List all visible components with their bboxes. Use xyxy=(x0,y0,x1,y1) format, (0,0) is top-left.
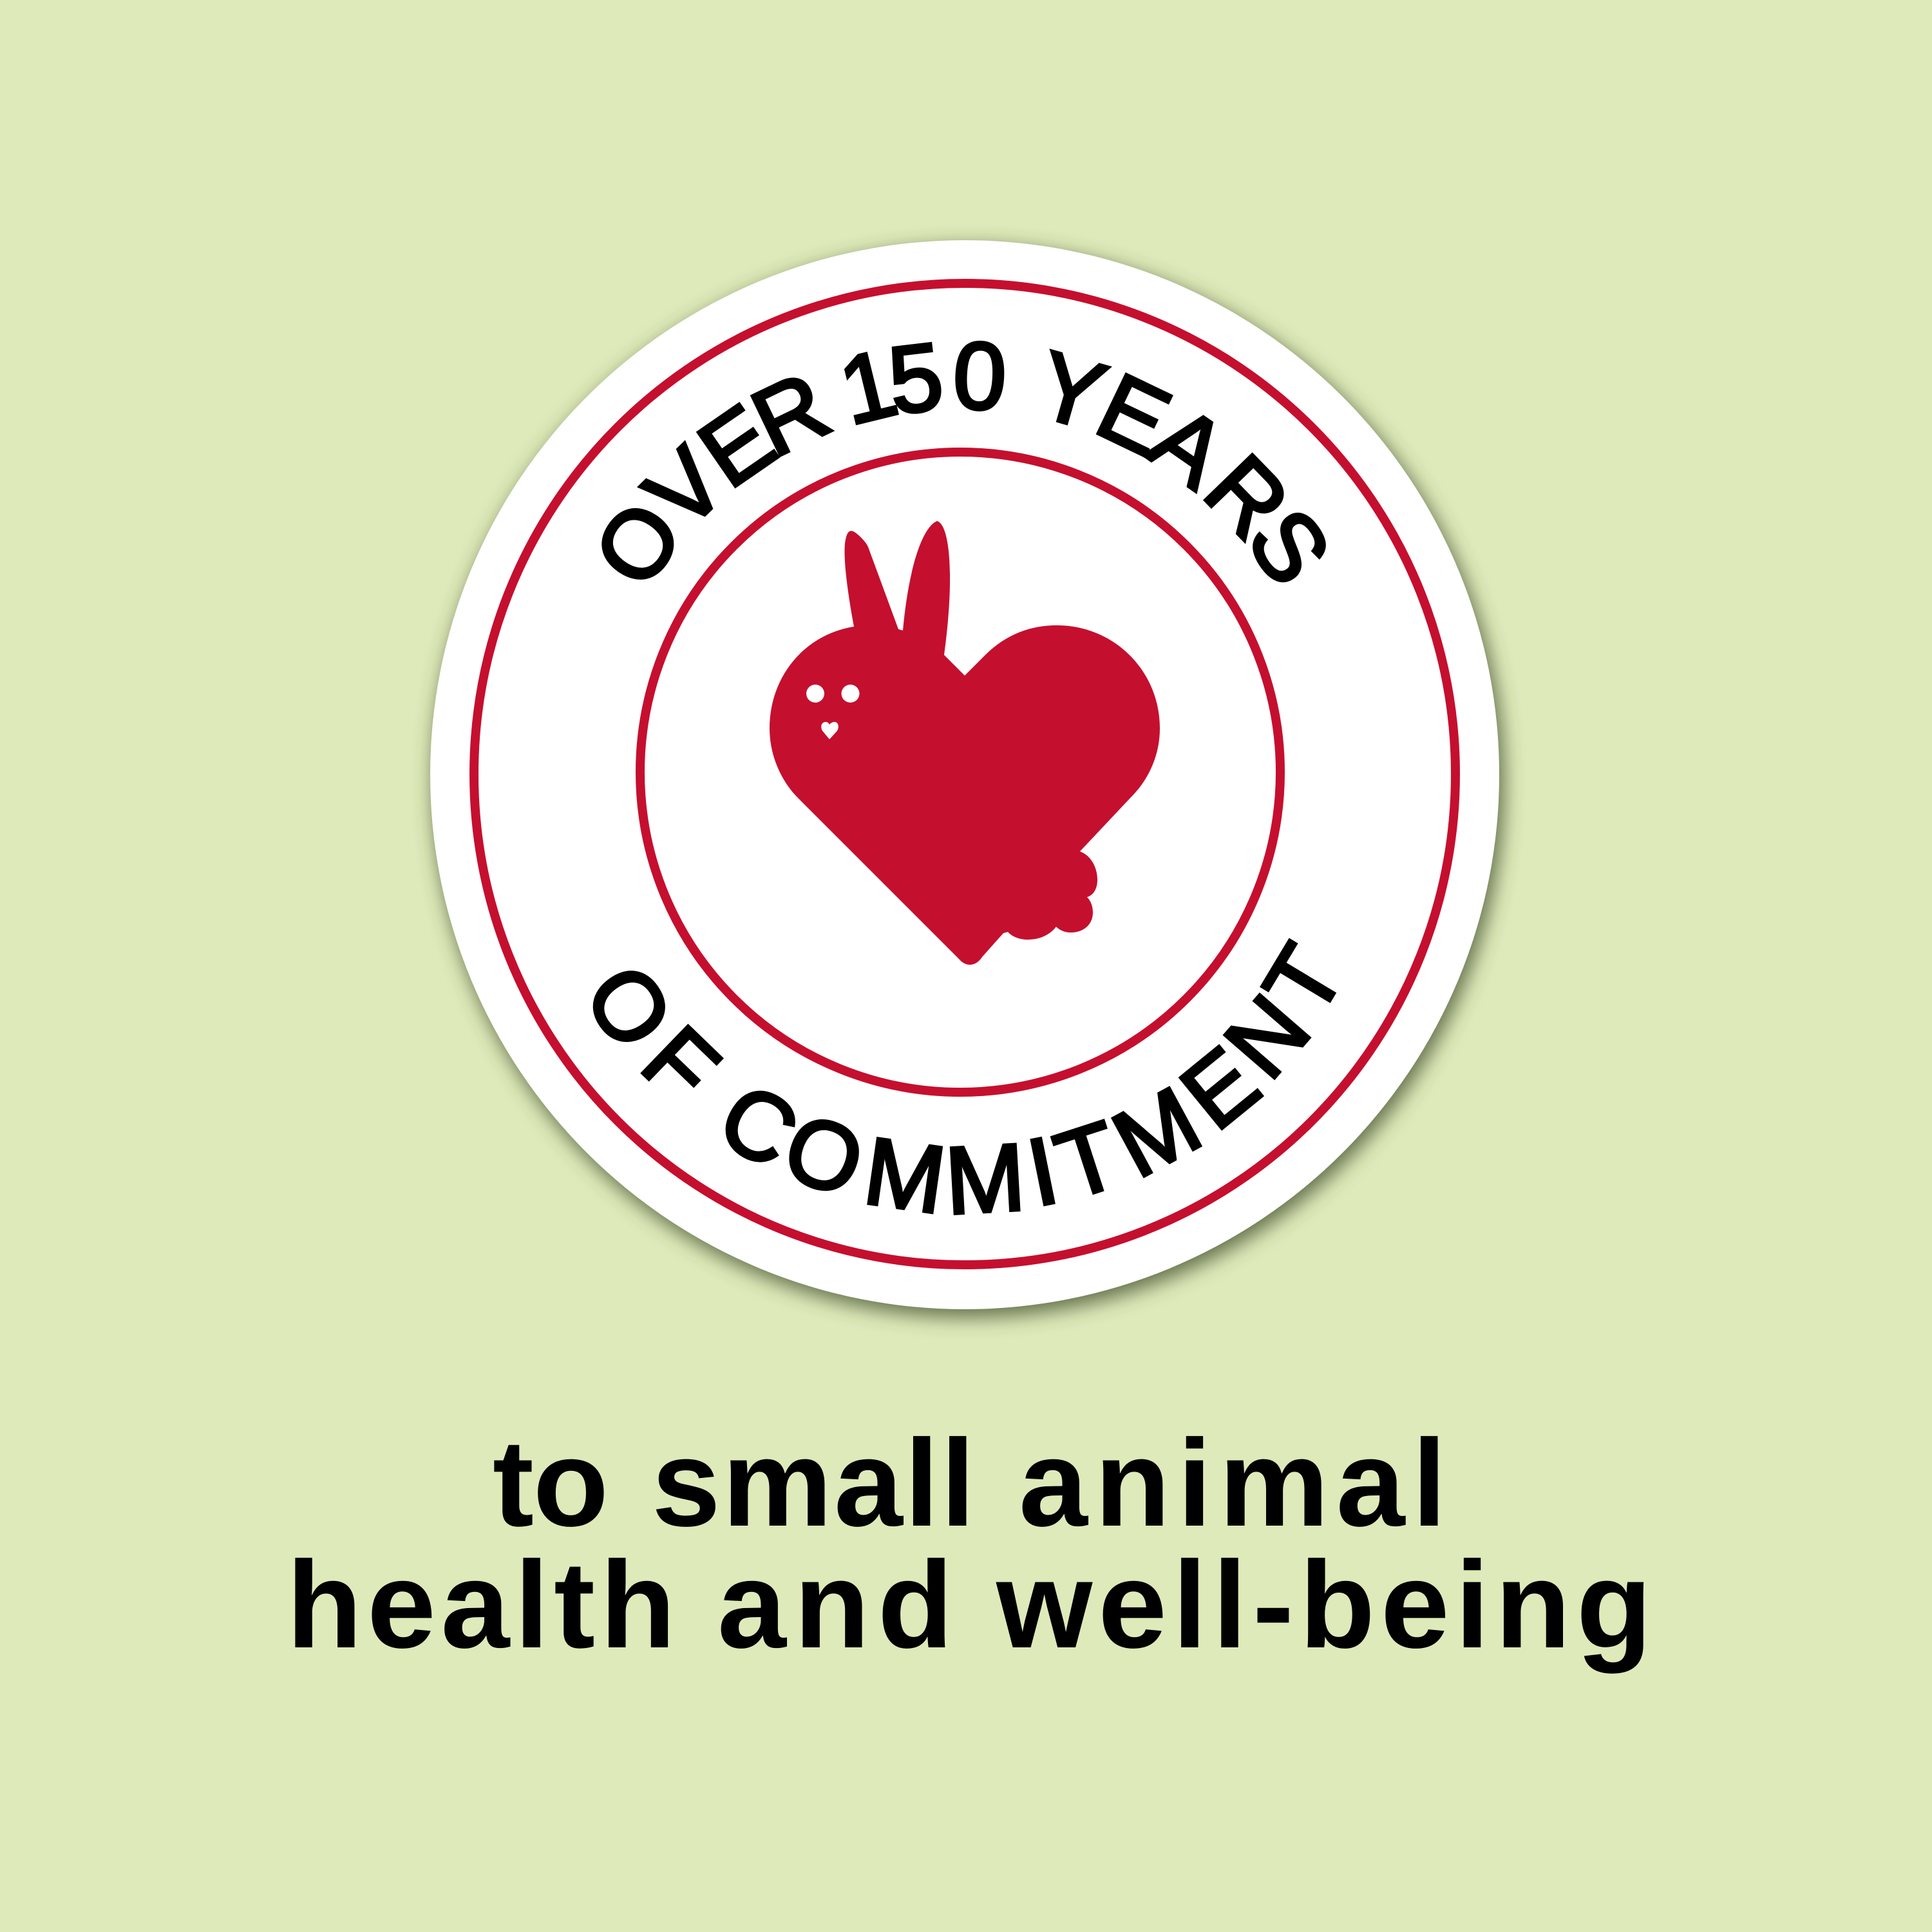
inner red ring xyxy=(640,452,1280,1092)
badge shadow xyxy=(433,246,1504,1318)
outer red ring xyxy=(474,283,1455,1265)
icon: rabbit heart xyxy=(770,521,1160,965)
badge xyxy=(430,240,1504,1318)
tagline line 1: animal xyxy=(1019,1414,1446,1552)
curved text: of commitment: OF COMMITMENT xyxy=(564,928,1365,1235)
rabbit heart body xyxy=(770,521,1160,965)
tagline line 2: well-being xyxy=(996,1535,1652,1674)
curved text: over 150 years: OVER 150 YEARS xyxy=(573,322,1351,605)
tagline line 2: health xyxy=(287,1535,676,1674)
tagline xyxy=(287,1414,1652,1674)
white badge disc xyxy=(430,240,1499,1309)
rabbit heart nose xyxy=(821,722,838,739)
rabbit left eye xyxy=(806,685,824,703)
tagline line 1: small xyxy=(652,1414,975,1552)
tagline line 2: and xyxy=(717,1535,953,1674)
tagline line 1: to xyxy=(493,1414,609,1552)
rabbit right eye xyxy=(841,685,859,703)
